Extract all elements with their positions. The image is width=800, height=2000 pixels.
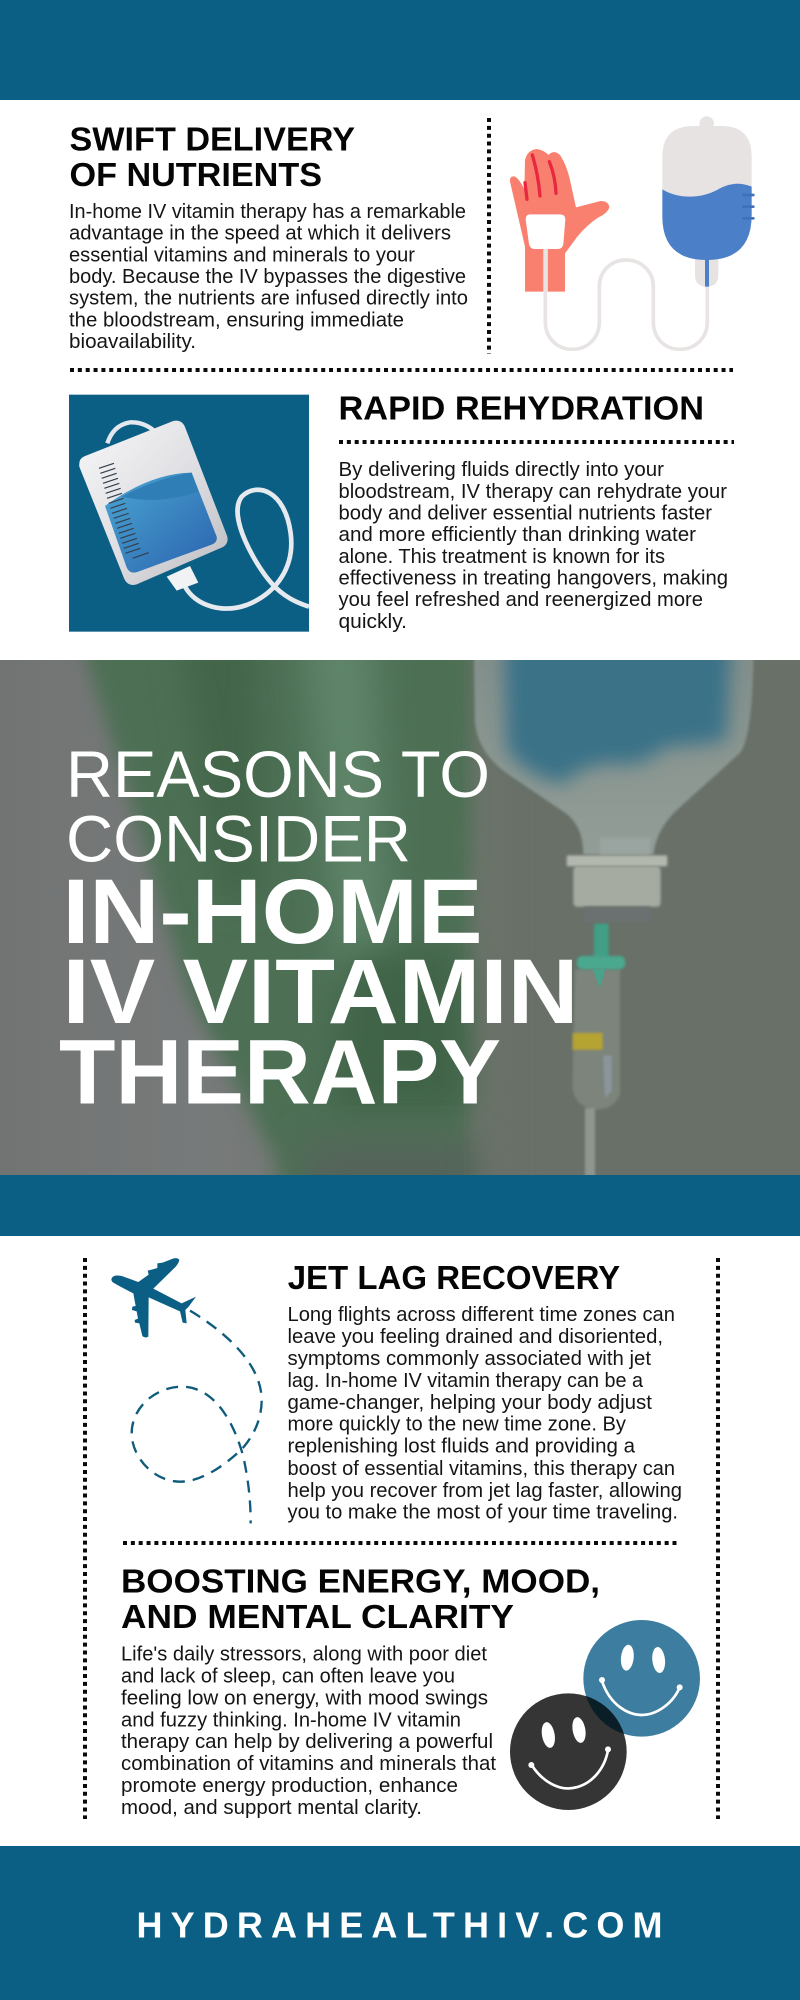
top banner [0, 0, 800, 100]
bag body [83, 425, 224, 581]
veins [525, 155, 556, 199]
text block: jet lag body: more quickly to the new time zone. By [288, 1413, 627, 1436]
middle banner [0, 1175, 800, 1236]
hero title text: CONSIDER [66, 802, 411, 876]
bandage [526, 214, 565, 249]
text block: boosting energy body [121, 1643, 496, 1819]
text block: jet lag body: lag. In-home IV vitamin therapy can be a [288, 1369, 644, 1392]
drip bag [662, 116, 753, 287]
hero title text: REASONS TO [66, 737, 490, 811]
heading: rapid rehydration: RAPID REHYDRATION [338, 389, 704, 426]
text block: jet lag body: boost of essential vitamins, this therapy can [288, 1457, 675, 1480]
text block: swift delivery body: In-home IV vitamin therapy has a remarkable [69, 200, 466, 223]
text block: jet lag body: symptoms commonly associated with jet [288, 1347, 651, 1370]
port [167, 566, 198, 591]
IV tube [545, 248, 707, 349]
text block: rapid rehydration body: effectiveness in treating hangovers, making [338, 566, 728, 590]
text block: rapid rehydration body: bloodstream, IV therapy can rehydrate your [338, 480, 727, 503]
text block: boosting energy body: feeling low on energy, with mood swings [121, 1686, 488, 1709]
heading: boosting energy: AND MENTAL CLARITY [121, 1598, 514, 1635]
text block: jet lag body [288, 1303, 682, 1524]
heading: swift delivery [70, 120, 355, 193]
icon: two smiley faces [510, 1620, 700, 1810]
text block: jet lag body: game-changer, helping your body adjust [288, 1391, 652, 1414]
airplane [111, 1258, 196, 1338]
text block: boosting energy body: mood, and support mental clarity. [121, 1796, 422, 1819]
panel: hero title [0, 660, 800, 1175]
text block: swift delivery body: bioavailability. [69, 330, 196, 353]
text block: jet lag body: help you recover from jet lag faster, allowing [288, 1479, 682, 1502]
gradation ticks [99, 463, 149, 558]
bag hanger [107, 422, 154, 443]
panel: rapid rehydration [69, 389, 734, 633]
text block: boosting energy body: Life's daily stressors, along with poor diet [121, 1643, 487, 1666]
text block: boosting energy body: and lack of sleep, can often leave you [121, 1664, 455, 1688]
hero title text: THERAPY [59, 1022, 501, 1124]
tubing [185, 490, 309, 609]
text block: boosting energy body: and fuzzy thinking. In-home IV vitamin [121, 1708, 461, 1731]
text block: boosting energy body: therapy can help by delivering a powerful [121, 1730, 493, 1753]
panel: jet lag recovery [111, 1258, 682, 1524]
heading: boosting energy [121, 1563, 600, 1635]
text block: swift delivery body: essential vitamins and minerals to your [69, 243, 415, 266]
hero title text: IV VITAMIN [62, 941, 578, 1043]
text block: jet lag body: you to make the most of your time traveling. [288, 1501, 678, 1524]
heading: jet lag recovery: JET LAG RECOVERY [288, 1259, 620, 1296]
text block: rapid rehydration body: By delivering fluids directly into your [338, 458, 664, 481]
text block: boosting energy body: promote energy production, enhance [121, 1774, 458, 1797]
text block: rapid rehydration body: and more efficiently than drinking water [338, 523, 696, 546]
icon: hand with IV bag [510, 116, 753, 349]
text block: jet lag body: Long flights across different time zones can [288, 1303, 675, 1326]
icon: airplane with dashed flight path [111, 1258, 262, 1523]
heading: swift delivery: OF NUTRIENTS [70, 156, 322, 193]
dark smiley [510, 1693, 627, 1810]
hero background photo [0, 660, 800, 1175]
text block: swift delivery body [69, 200, 468, 353]
heading: swift delivery: SWIFT DELIVERY [70, 120, 355, 158]
dashed flight path [132, 1311, 262, 1523]
hand [510, 149, 609, 292]
text block: boosting energy body: combination of vitamins and minerals that [121, 1752, 496, 1775]
footer website: HYDRAHEALTHIV.COM [136, 1904, 662, 1945]
text block: jet lag body: leave you feeling drained and disoriented, [288, 1325, 663, 1348]
text block: swift delivery body: advantage in the speed at which it delivers [69, 222, 451, 245]
icon: IV bag on blue square [69, 395, 309, 632]
panel: swift delivery of nutrients [69, 116, 753, 354]
text block: rapid rehydration body: quickly. [338, 610, 407, 633]
text block: rapid rehydration body [338, 458, 728, 633]
text block: rapid rehydration body: you feel refreshed and reenergized more [338, 588, 703, 611]
footer banner [0, 1846, 800, 2000]
text block: jet lag body: replenishing lost fluids and providing a [288, 1435, 636, 1458]
heading: boosting energy: BOOSTING ENERGY, MOOD, [121, 1563, 600, 1600]
blue smiley [583, 1620, 700, 1737]
hero title text: IN-HOME [62, 861, 482, 963]
text block: swift delivery body: body. Because the IV bypasses the digestive [69, 265, 466, 288]
text block: swift delivery body: the bloodstream, ensuring immediate [69, 308, 404, 331]
panel: boosting energy, mood and mental clarity [121, 1563, 700, 1819]
IV bottle and drip chamber [473, 660, 754, 1175]
text block: rapid rehydration body: body and deliver essential nutrients faster [338, 502, 712, 524]
hero title text [59, 737, 578, 1124]
text block: rapid rehydration body: alone. This treatment is known for its [338, 545, 665, 568]
text block: swift delivery body: system, the nutrients are infused directly into [69, 287, 468, 310]
